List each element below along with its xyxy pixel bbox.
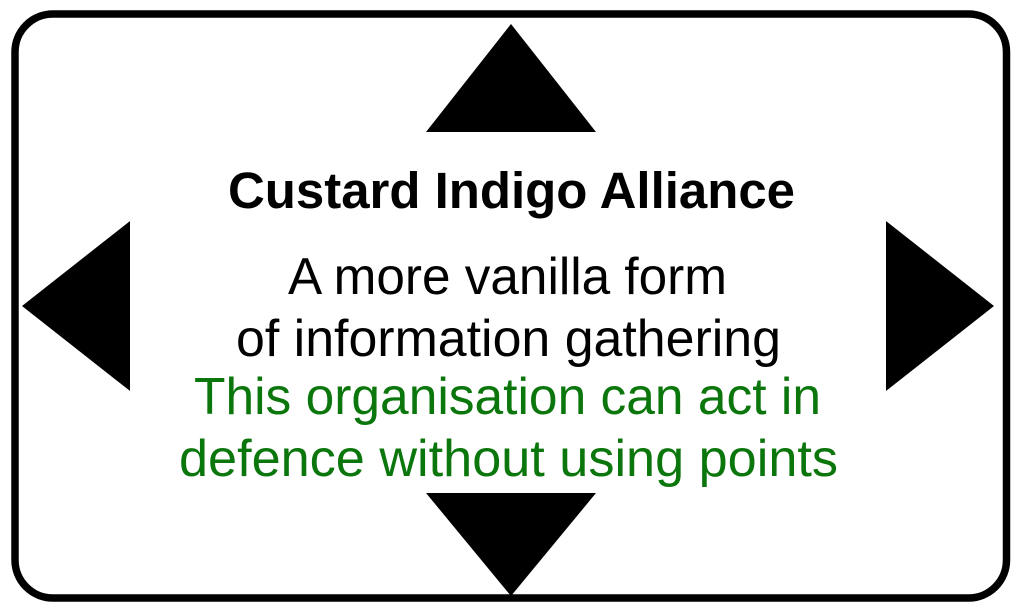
description: A more vanilla form [288, 247, 727, 305]
arrow: left [22, 221, 130, 391]
arrow: down [426, 493, 596, 596]
arrow: up [426, 24, 596, 132]
green ability text: This organisation can act in [194, 367, 821, 425]
green ability text [179, 367, 838, 487]
title: Custard Indigo Alliance [228, 162, 795, 219]
green ability text: defence without using points [179, 429, 838, 487]
description: of information gathering [236, 309, 781, 367]
arrow: right [886, 221, 994, 391]
description [236, 247, 781, 367]
